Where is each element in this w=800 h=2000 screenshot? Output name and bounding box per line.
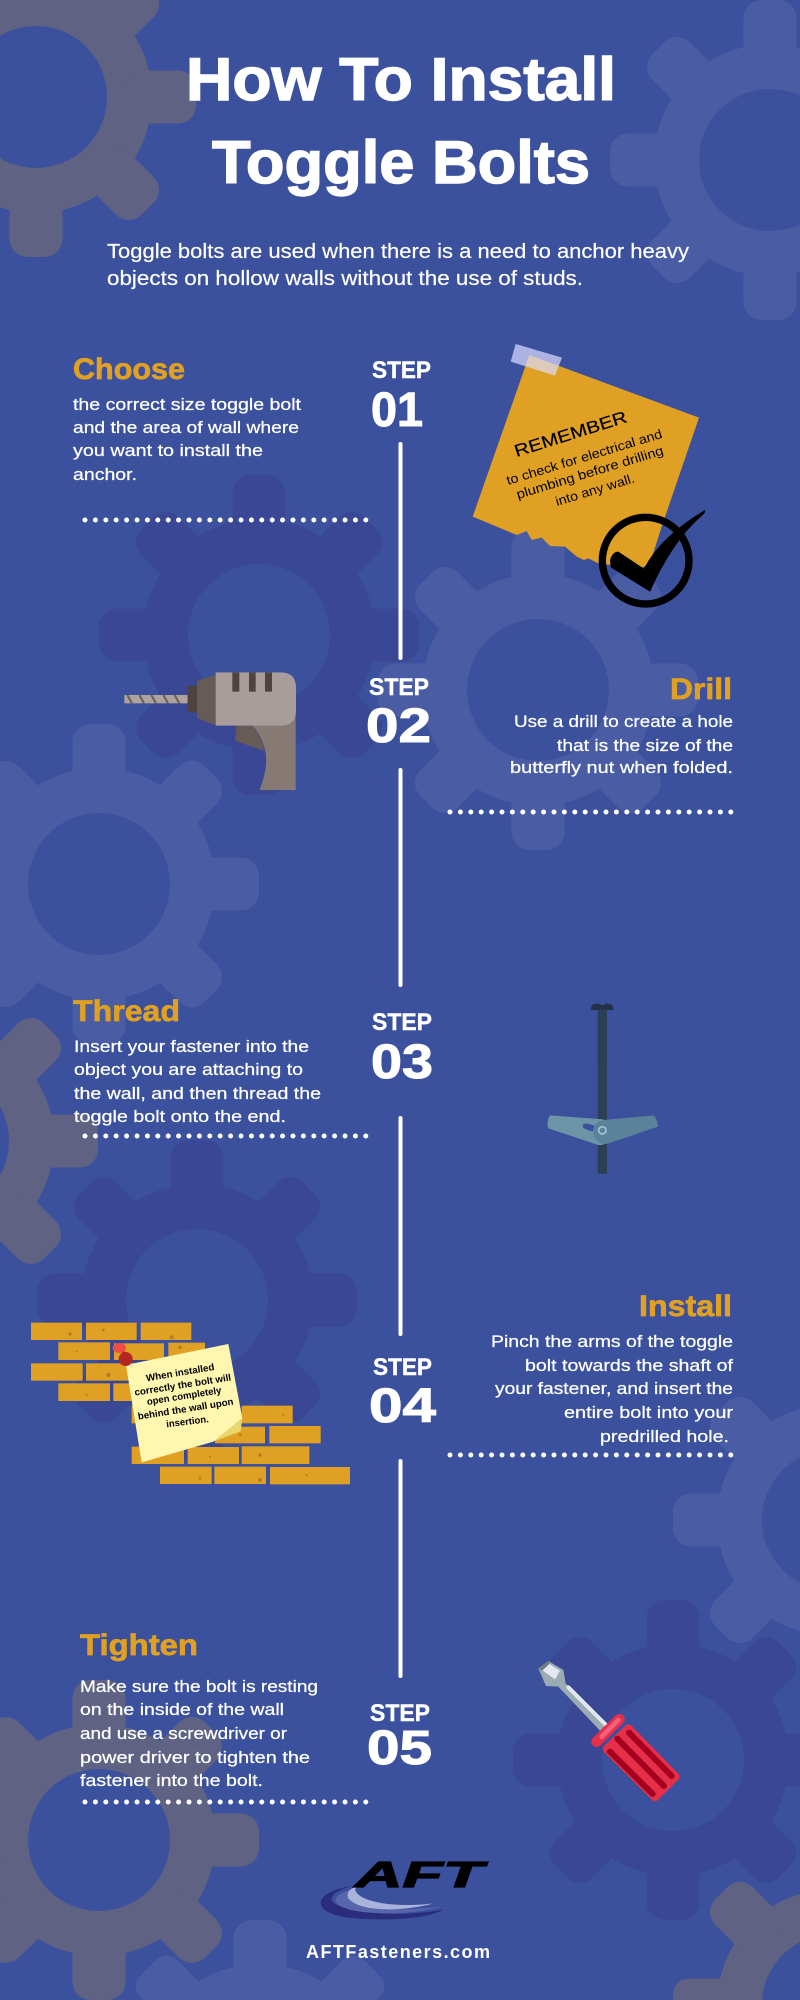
title — [186, 46, 616, 196]
step label 03: STEP — [372, 1009, 432, 1036]
intro text: objects on hollow walls without the use of studs. — [107, 268, 583, 290]
panel: step 1 choose — [73, 353, 431, 520]
text: choose description — [73, 395, 301, 484]
step label 04: 04 — [369, 1380, 436, 1433]
text: thread description — [74, 1037, 321, 1126]
text: drill description: butterfly nut when folded. — [510, 758, 733, 777]
step label 01: 01 — [371, 384, 423, 437]
logo: AFT — [321, 1854, 488, 1919]
logo letters: AFT — [353, 1854, 488, 1895]
timeline line — [398, 444, 402, 1676]
icon: brick wall with sticky note — [31, 1323, 350, 1484]
brick wall — [31, 1323, 350, 1484]
title: Toggle Bolts — [212, 129, 590, 196]
step label 02 — [366, 674, 431, 753]
sticky note text — [134, 1362, 234, 1430]
sticky note text: behind the wall upon — [137, 1397, 234, 1423]
logo swoosh — [321, 1885, 444, 1919]
text: choose description: and the area of wall where — [73, 418, 299, 437]
text: install description: Pinch the arms of the toggle — [491, 1332, 733, 1351]
website url: AFTFasteners.com — [306, 1942, 490, 1962]
step label 05 — [367, 1700, 432, 1775]
text: tighten description: Make sure the bolt is resting — [80, 1677, 318, 1696]
sticky note text: open completely — [146, 1385, 223, 1408]
panel: step 2 drill — [366, 673, 733, 812]
step label 02: STEP — [369, 674, 429, 701]
text: install description: your fastener, and insert the — [495, 1379, 733, 1398]
note text: REMEMBER — [512, 408, 629, 461]
text: tighten description: fastener into the bolt. — [80, 1771, 263, 1790]
step label 01 — [371, 357, 431, 437]
text: drill description: that is the size of the — [557, 736, 733, 755]
text: choose description: the correct size toggle bolt — [73, 395, 301, 414]
text: tighten description: power driver to tighten the — [80, 1748, 310, 1767]
sticky note text: insertion. — [166, 1414, 210, 1430]
icon: push pin — [113, 1343, 133, 1367]
text: thread description: toggle bolt onto the end. — [74, 1107, 286, 1126]
sticky note text: When installed — [145, 1362, 215, 1384]
panel: step 5 tighten — [80, 1629, 432, 1802]
icon: checkmark — [602, 510, 705, 604]
text: tighten description: and use a screwdriver or — [80, 1724, 287, 1743]
note paper — [473, 344, 699, 569]
text: tighten description: on the inside of the wall — [80, 1700, 284, 1719]
heading: tighten: Tighten — [80, 1629, 198, 1662]
step label 04: STEP — [373, 1354, 432, 1381]
text: install description: entire bolt into your — [564, 1403, 733, 1422]
intro text: Toggle bolts are used when there is a need to anchor heavy — [107, 241, 689, 263]
note text: into any wall. — [553, 471, 636, 509]
text: choose description: you want to install the — [73, 441, 263, 460]
text: install description: predrilled hole. — [600, 1427, 729, 1446]
text: drill description — [510, 712, 733, 777]
sticky note text: correctly the bolt will — [134, 1372, 232, 1399]
icon: toggle bolt — [547, 1004, 658, 1174]
text: tighten description — [80, 1677, 318, 1790]
panel: step 3 thread — [73, 995, 433, 1136]
text: install description — [491, 1332, 733, 1446]
heading: install: Install — [639, 1290, 732, 1323]
note text: to check for electrical and — [504, 426, 664, 488]
text: thread description: object you are attaching to — [74, 1060, 303, 1079]
text: thread description: the wall, and then thread the — [74, 1084, 321, 1103]
step label 02: 02 — [366, 700, 431, 753]
step label 01: STEP — [372, 357, 431, 384]
title: How To Install — [186, 46, 616, 113]
step label 05: 05 — [367, 1722, 432, 1775]
icon: screwdriver — [538, 1661, 676, 1797]
step label 03 — [371, 1009, 433, 1089]
note text — [504, 408, 665, 509]
text: thread description: Insert your fastener into the — [74, 1037, 309, 1056]
step label 05: STEP — [370, 1700, 430, 1727]
icon: drill — [124, 672, 296, 790]
step label 03: 03 — [371, 1036, 433, 1089]
note text: plumbing before drilling — [514, 443, 665, 502]
panel: step 4 install — [369, 1290, 733, 1455]
heading: choose: Choose — [73, 353, 185, 386]
intro text — [107, 241, 689, 290]
text: choose description: anchor. — [73, 465, 137, 484]
callout: remember note — [473, 344, 705, 604]
text: drill description: Use a drill to create a hole — [514, 712, 733, 731]
sticky note — [126, 1344, 242, 1462]
heading: thread: Thread — [73, 995, 180, 1028]
text: install description: bolt towards the shaft of — [525, 1356, 733, 1375]
heading: drill: Drill — [670, 673, 732, 706]
step label 04 — [369, 1354, 436, 1433]
